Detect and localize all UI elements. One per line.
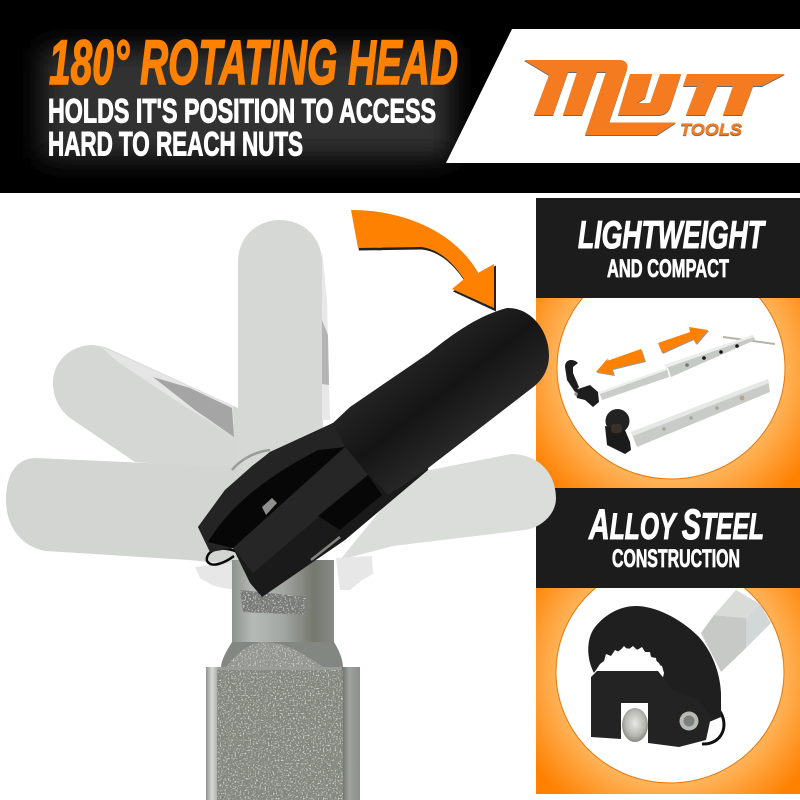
- rivet glint: [262, 498, 277, 515]
- subheading line 1: HOLDS IT'S POSITION TO ACCESS: [48, 92, 436, 130]
- main black rotating head: [198, 308, 549, 597]
- white circle: [556, 588, 784, 784]
- ghost head: horizontal left: [6, 458, 250, 565]
- tool: wrench close-up: [588, 590, 771, 747]
- rubber cap: [333, 308, 549, 495]
- curved rotation arrow: [351, 210, 496, 312]
- panel: alloy steel construction: [536, 488, 800, 794]
- header band: [0, 0, 800, 193]
- ghost head: tilted left: [53, 345, 242, 470]
- logo panel: [446, 29, 800, 163]
- tool: collapsed wrench: [605, 379, 770, 454]
- lower rivet: [311, 537, 340, 560]
- upper plate: [198, 423, 345, 552]
- panel subheading: and compact: AND COMPACT: [607, 255, 729, 283]
- ghost teeth: [195, 556, 373, 590]
- panel heading: alloy steel: ALLOY STEEL: [588, 501, 764, 549]
- lower slot: [318, 475, 382, 530]
- logo: Mutt Tools: TOOLS: [680, 121, 742, 139]
- upper gap: [208, 447, 345, 548]
- head base silhouette: [198, 372, 429, 597]
- wrench shaft and tube: [206, 560, 360, 800]
- arrow: extend right: [658, 327, 708, 353]
- white circle: [556, 298, 786, 480]
- ghost head: horizontal right: [340, 454, 556, 560]
- ghost head: vertical: [238, 220, 330, 480]
- logo: Mutt Tools: [524, 60, 785, 139]
- spring: [207, 549, 238, 565]
- panel: lightweight and compact: [536, 198, 800, 488]
- tool: extended wrench: [565, 335, 775, 407]
- headline: 180° ROTATING HEAD: [49, 28, 458, 98]
- arrow: extend left: [596, 349, 645, 375]
- ghosted head positions: [6, 220, 556, 590]
- subheading line 2: HARD TO REACH NUTS: [48, 126, 303, 164]
- center bar: [233, 447, 368, 573]
